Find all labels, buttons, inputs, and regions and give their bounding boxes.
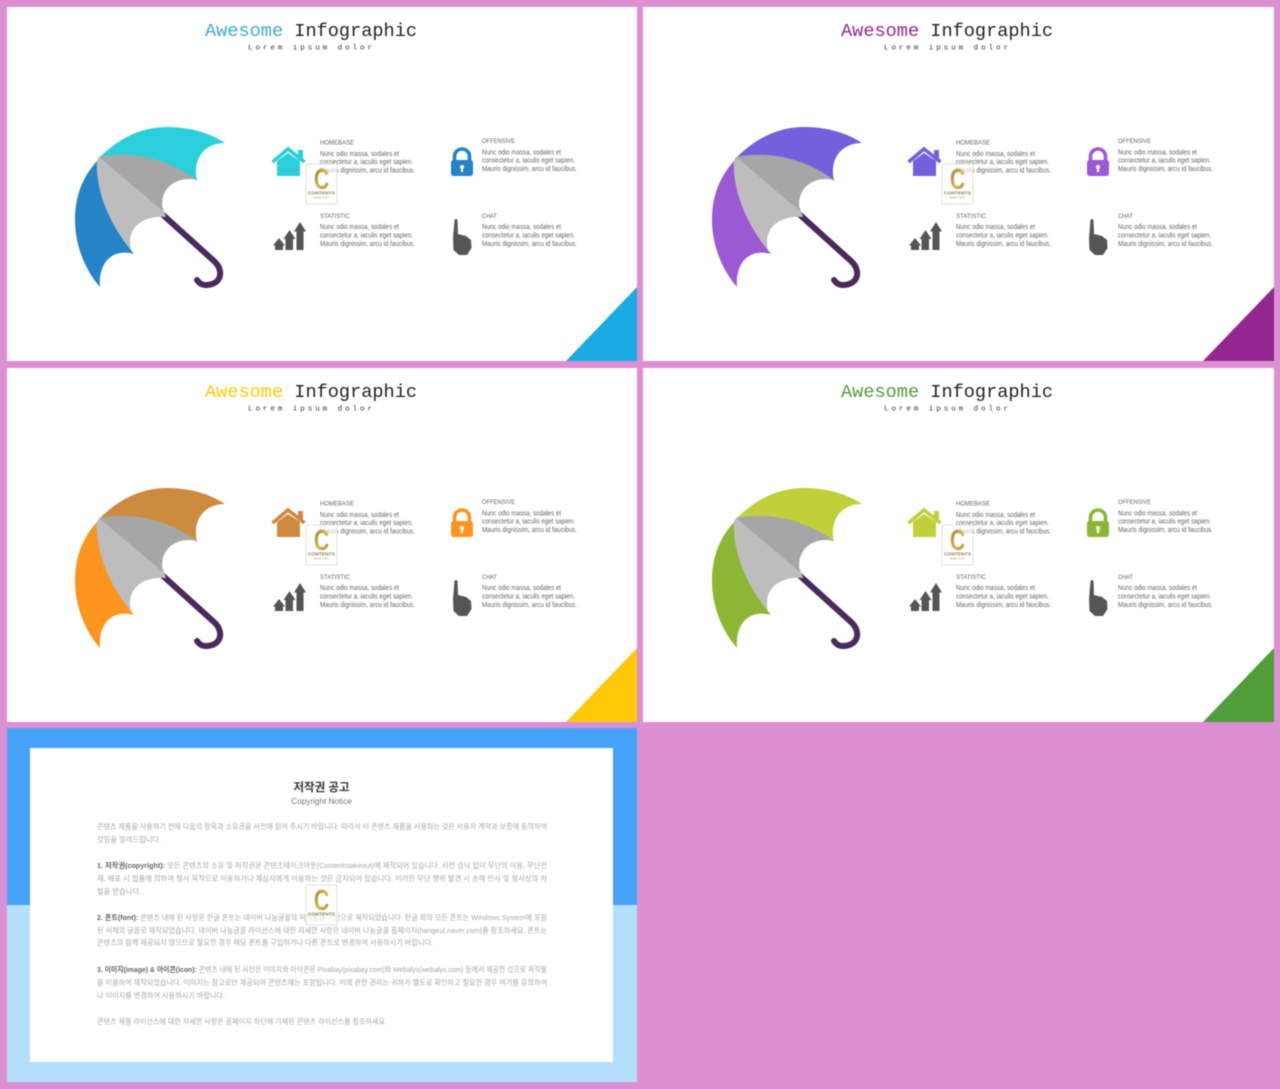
offensive text: consectetur a, iaculis eget sapien. — [482, 158, 575, 164]
notice heading: 저작권 공고 — [293, 780, 350, 794]
statistic text: STATISTIC — [320, 213, 351, 220]
intro paragraph — [97, 821, 547, 844]
statistic text: Nunc odio massa, sodales et — [320, 224, 399, 231]
umbrella illustration — [712, 127, 862, 287]
watermark badge: C — [950, 164, 965, 196]
chat text: consectetur a, iaculis eget sapien. — [1118, 594, 1211, 600]
icon: rising arrows — [909, 222, 942, 250]
umbrella illustration — [712, 488, 862, 648]
corner triangle — [566, 287, 637, 361]
chat text: consectetur a, iaculis eget sapien. — [482, 594, 575, 600]
homebase text — [320, 140, 415, 174]
section 3: image and icon: 나 이미지를 변경하여 사용하시기 바랍니다. — [97, 990, 225, 1000]
statistic text — [956, 574, 1051, 609]
section 1: copyright: 1. 저작권(copyright): 모든 콘텐츠의 소유 및 저작권은 콘텐츠테이크아웃(Contentstakeout)에 제작되어 있습니다. 사전 승낙 없이 무단의 이용, 무단전 — [97, 860, 547, 870]
section 1: copyright — [97, 860, 547, 896]
umbrella illustration — [75, 127, 225, 287]
chat text — [482, 574, 577, 609]
chat text: Nunc odio massa, sodales et — [482, 585, 561, 592]
offensive text — [1118, 499, 1213, 534]
statistic text: Mauris dignissim, arcu id faucibus. — [956, 602, 1051, 609]
title: Awesome Infographic — [841, 382, 1053, 403]
icon: pointing hand — [1089, 219, 1108, 255]
offensive text — [482, 138, 577, 173]
watermark badge — [942, 164, 973, 204]
statistic text: Nunc odio massa, sodales et — [956, 585, 1035, 592]
homebase text: HOMEBASE — [320, 140, 354, 146]
icon: padlock — [1087, 510, 1109, 537]
watermark badge: C — [314, 885, 329, 917]
icon: house — [908, 510, 940, 537]
statistic text — [320, 213, 415, 248]
homebase text: Mauris dignissim, arcu id faucibus. — [320, 168, 415, 174]
offensive text: OFFENSIVE — [482, 138, 515, 145]
title: Awesome Infographic — [205, 21, 417, 42]
watermark badge: CONTENTS — [944, 190, 972, 196]
icon: house — [272, 510, 304, 537]
offensive text: OFFENSIVE — [1118, 499, 1151, 506]
icon: rising arrows — [273, 583, 306, 611]
offensive text — [1118, 138, 1213, 173]
subtitle: Lorem ipsum dolor — [884, 44, 1008, 52]
offensive text: OFFENSIVE — [1118, 138, 1151, 145]
statistic text: STATISTIC — [956, 574, 987, 581]
section 2: font: 2. 폰트(font): 콘텐츠 내에 된 사항은 한글 폰트는 네이버 나눔글꼴의 저작물을 기반으로 제작되었습니다. 한글 외의 모든 폰트는 Windows System에 포함 — [97, 912, 547, 922]
subtitle: Lorem ipsum dolor — [248, 44, 372, 52]
chat text: CHAT — [482, 574, 497, 581]
icon: padlock — [1087, 149, 1109, 176]
offensive text: Mauris dignissim, arcu id faucibus. — [482, 527, 577, 534]
chat text: CHAT — [482, 213, 497, 220]
icon: rising arrows — [909, 583, 942, 611]
notice subheading: Copyright Notice — [291, 797, 352, 806]
offensive text: consectetur a, iaculis eget sapien. — [482, 518, 575, 526]
section 3: image and icon: 을 이용하여 제작되었습니다. 이미지는 참고로만 제공되며 콘텐츠에는 포함됩니다. 이에 관한 권리는 귀하가 별도로 확인하고 필요한 경우 여기를 유의하여 — [97, 977, 547, 987]
watermark badge: MAKE COPY — [950, 556, 965, 560]
chat text: Mauris dignissim, arcu id faucibus. — [1118, 602, 1213, 609]
homebase text: Nunc odio massa, sodales et — [956, 151, 1035, 158]
offensive text: consectetur a, iaculis eget sapien. — [1118, 158, 1211, 164]
section 2: font: 콘텐츠의 함께 제공되지 않으므로 필요한 경우 해당 폰트를 구입하거나 다른 폰트로 변경하여 사용하시기 바랍니다. — [97, 937, 433, 947]
homebase text: Mauris dignissim, arcu id faucibus. — [320, 528, 415, 536]
homebase text: Nunc odio massa, sodales et — [320, 512, 399, 519]
watermark badge — [306, 885, 337, 925]
offensive text: Nunc odio massa, sodales et — [482, 150, 561, 156]
panel: green umbrella slide — [643, 368, 1274, 722]
watermark badge: MAKE COPY — [950, 196, 965, 200]
homebase text — [320, 500, 415, 536]
section 3: image and icon: 3. 이미지(image) & 아이콘(icon): 콘텐츠 내에 된 사진은 이미지와 아이콘은 Pixabay(pixabay.com)와 Webalys(webalys.com) 등에서 제공한 것으로 저작물 — [97, 964, 547, 974]
chat text — [482, 213, 577, 248]
offensive text: Mauris dignissim, arcu id faucibus. — [1118, 166, 1213, 173]
homebase text: consectetur a, iaculis eget sapien. — [320, 159, 413, 166]
statistic text: consectetur a, iaculis eget sapien. — [320, 594, 413, 600]
statistic text: STATISTIC — [320, 574, 351, 581]
icon: padlock — [451, 510, 473, 537]
section 2: font — [97, 912, 547, 947]
statistic text: Mauris dignissim, arcu id faucibus. — [320, 602, 415, 609]
offensive text: Nunc odio massa, sodales et — [482, 510, 561, 518]
panel: purple umbrella slide — [643, 7, 1274, 361]
watermark badge: CONTENTS — [308, 912, 336, 918]
offensive text: OFFENSIVE — [482, 499, 515, 506]
subtitle: Lorem ipsum dolor — [884, 406, 1008, 414]
chat text: Mauris dignissim, arcu id faucibus. — [1118, 241, 1213, 248]
statistic text — [320, 574, 415, 609]
offensive text: Nunc odio massa, sodales et — [1118, 510, 1197, 518]
homebase text: HOMEBASE — [956, 140, 990, 146]
closing line: 콘텐츠 제품 라이선스에 대한 자세한 사항은 홈페이지 하단에 기재된 콘텐츠 라이선스를 참조하세요. — [97, 1016, 387, 1026]
offensive text: Mauris dignissim, arcu id faucibus. — [1118, 527, 1213, 534]
title: Awesome Infographic — [841, 21, 1053, 42]
statistic text: Mauris dignissim, arcu id faucibus. — [320, 241, 415, 248]
homebase text: HOMEBASE — [320, 500, 354, 508]
chat text: Mauris dignissim, arcu id faucibus. — [482, 602, 577, 609]
chat text — [1118, 213, 1213, 248]
chat text: CHAT — [1118, 213, 1133, 220]
umbrella illustration — [75, 488, 225, 648]
corner triangle — [566, 648, 637, 722]
chat text — [1118, 574, 1213, 609]
icon: rising arrows — [273, 222, 306, 250]
icon: pointing hand — [1089, 580, 1108, 616]
watermark badge: CONTENTS — [944, 552, 972, 558]
chat text: Mauris dignissim, arcu id faucibus. — [482, 241, 577, 248]
homebase text: consectetur a, iaculis eget sapien. — [956, 159, 1049, 166]
title: Awesome Infographic — [205, 382, 417, 403]
homebase text — [956, 500, 1051, 536]
homebase text — [956, 140, 1051, 174]
chat text: Nunc odio massa, sodales et — [1118, 585, 1197, 592]
statistic text: STATISTIC — [956, 213, 987, 220]
statistic text: consectetur a, iaculis eget sapien. — [320, 232, 413, 240]
section 3: image and icon — [97, 964, 547, 1000]
intro paragraph: 것임을 알려드립니다. — [97, 834, 161, 844]
statistic text: Nunc odio massa, sodales et — [956, 224, 1035, 231]
homebase text: Nunc odio massa, sodales et — [320, 151, 399, 158]
icon: house — [908, 149, 940, 176]
icon: pointing hand — [453, 219, 472, 255]
statistic text: consectetur a, iaculis eget sapien. — [956, 232, 1049, 240]
watermark badge: CONTENTS — [308, 552, 336, 558]
panel: teal umbrella slide — [7, 7, 637, 361]
panel: orange umbrella slide — [7, 368, 637, 722]
chat text: CHAT — [1118, 574, 1133, 581]
watermark badge: C — [314, 525, 329, 557]
homebase text: Mauris dignissim, arcu id faucibus. — [956, 528, 1051, 536]
offensive text: Nunc odio massa, sodales et — [1118, 150, 1197, 156]
offensive text: Mauris dignissim, arcu id faucibus. — [482, 166, 577, 173]
icon: pointing hand — [453, 580, 472, 616]
chat text: Nunc odio massa, sodales et — [482, 224, 561, 231]
homebase text: consectetur a, iaculis eget sapien. — [320, 520, 413, 527]
statistic text: consectetur a, iaculis eget sapien. — [956, 594, 1049, 600]
watermark badge — [306, 164, 337, 204]
homebase text: Nunc odio massa, sodales et — [956, 512, 1035, 519]
offensive text: consectetur a, iaculis eget sapien. — [1118, 518, 1211, 526]
homebase text: Mauris dignissim, arcu id faucibus. — [956, 168, 1051, 174]
watermark badge: MAKE COPY — [314, 556, 329, 560]
section 2: font: 된 서체의 글꼴로 제작되었습니다. 네이버 나눔글꼴 라이선스에 대한 자세한 사항은 네이버 나눔글꼴 홈페이지(hangeul.naver.com)를 참조하세요. 폰트는 — [97, 925, 547, 935]
icon: house — [272, 149, 304, 176]
section 1: copyright: 벌을 받습니다. — [97, 886, 141, 896]
watermark badge: C — [314, 164, 329, 196]
watermark badge: CONTENTS — [308, 190, 336, 196]
chat text: consectetur a, iaculis eget sapien. — [482, 232, 575, 240]
homebase text: HOMEBASE — [956, 500, 990, 508]
corner triangle — [1203, 648, 1274, 722]
watermark badge — [306, 525, 337, 565]
offensive text — [482, 499, 577, 534]
chat text: Nunc odio massa, sodales et — [1118, 224, 1197, 231]
watermark badge: MAKE COPY — [314, 196, 329, 200]
section 1: copyright: 재, 배포 시 법률에 의하여 형사 목적으로 이용하거나 제삼자에게 이용하는 것은 금지되어 있습니다. 이러한 무단 행위 발견 시 손해 민사 및 형사상의 처 — [97, 873, 547, 883]
subtitle: Lorem ipsum dolor — [248, 406, 372, 414]
statistic text: Nunc odio massa, sodales et — [320, 585, 399, 592]
corner triangle — [1203, 287, 1274, 361]
statistic text — [956, 213, 1051, 248]
intro paragraph: 콘텐츠 제품을 사용하기 전에 다음의 항목과 소유권을 사전에 읽어 주시기 바랍니다. 따라서 이 콘텐츠 제품을 사용하는 것은 사용자 계약과 보증에 동의하여 — [97, 821, 547, 831]
watermark badge — [942, 525, 973, 565]
icon: padlock — [451, 149, 473, 176]
watermark badge: C — [950, 525, 965, 557]
homebase text: consectetur a, iaculis eget sapien. — [956, 520, 1049, 527]
panel: copyright notice — [7, 728, 637, 1082]
chat text: consectetur a, iaculis eget sapien. — [1118, 232, 1211, 240]
statistic text: Mauris dignissim, arcu id faucibus. — [956, 241, 1051, 248]
